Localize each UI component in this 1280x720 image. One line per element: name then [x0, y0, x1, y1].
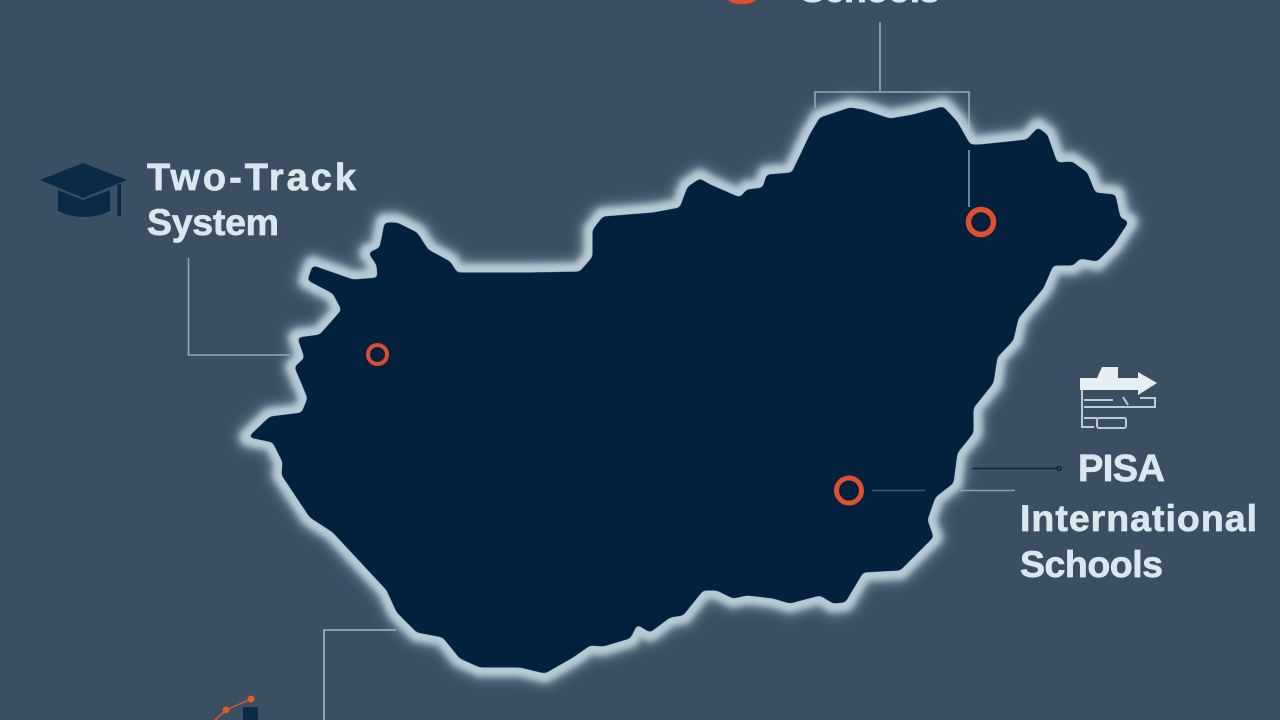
label: Two-Track System	[147, 157, 357, 243]
connector: into map north-east	[968, 150, 970, 207]
label: PISA International Schools: PISA	[1078, 448, 1165, 490]
connector: south-east marker	[872, 490, 1015, 492]
icon: cropped chart	[215, 696, 258, 720]
connector: two-track	[188, 258, 290, 355]
label: PISA International Schools: Schools	[1020, 543, 1163, 585]
icon: PISA arrow document	[1080, 367, 1157, 428]
connector: PISA	[972, 466, 1061, 470]
icon: partially cropped top marker	[727, 0, 757, 4]
label: Two-Track System: Two-Track	[147, 157, 357, 199]
icon: graduation cap	[40, 163, 127, 217]
label: PISA International Schools: International	[1020, 497, 1257, 539]
marker: south-east	[836, 478, 862, 503]
map of Hungary	[249, 107, 1128, 673]
marker: north-east	[968, 210, 994, 234]
marker: west	[368, 345, 387, 364]
connector: top bracket	[815, 22, 969, 148]
connector: bottom	[324, 630, 396, 720]
label: PISA International Schools	[1020, 448, 1257, 585]
label: Two-Track System: System	[147, 201, 279, 243]
